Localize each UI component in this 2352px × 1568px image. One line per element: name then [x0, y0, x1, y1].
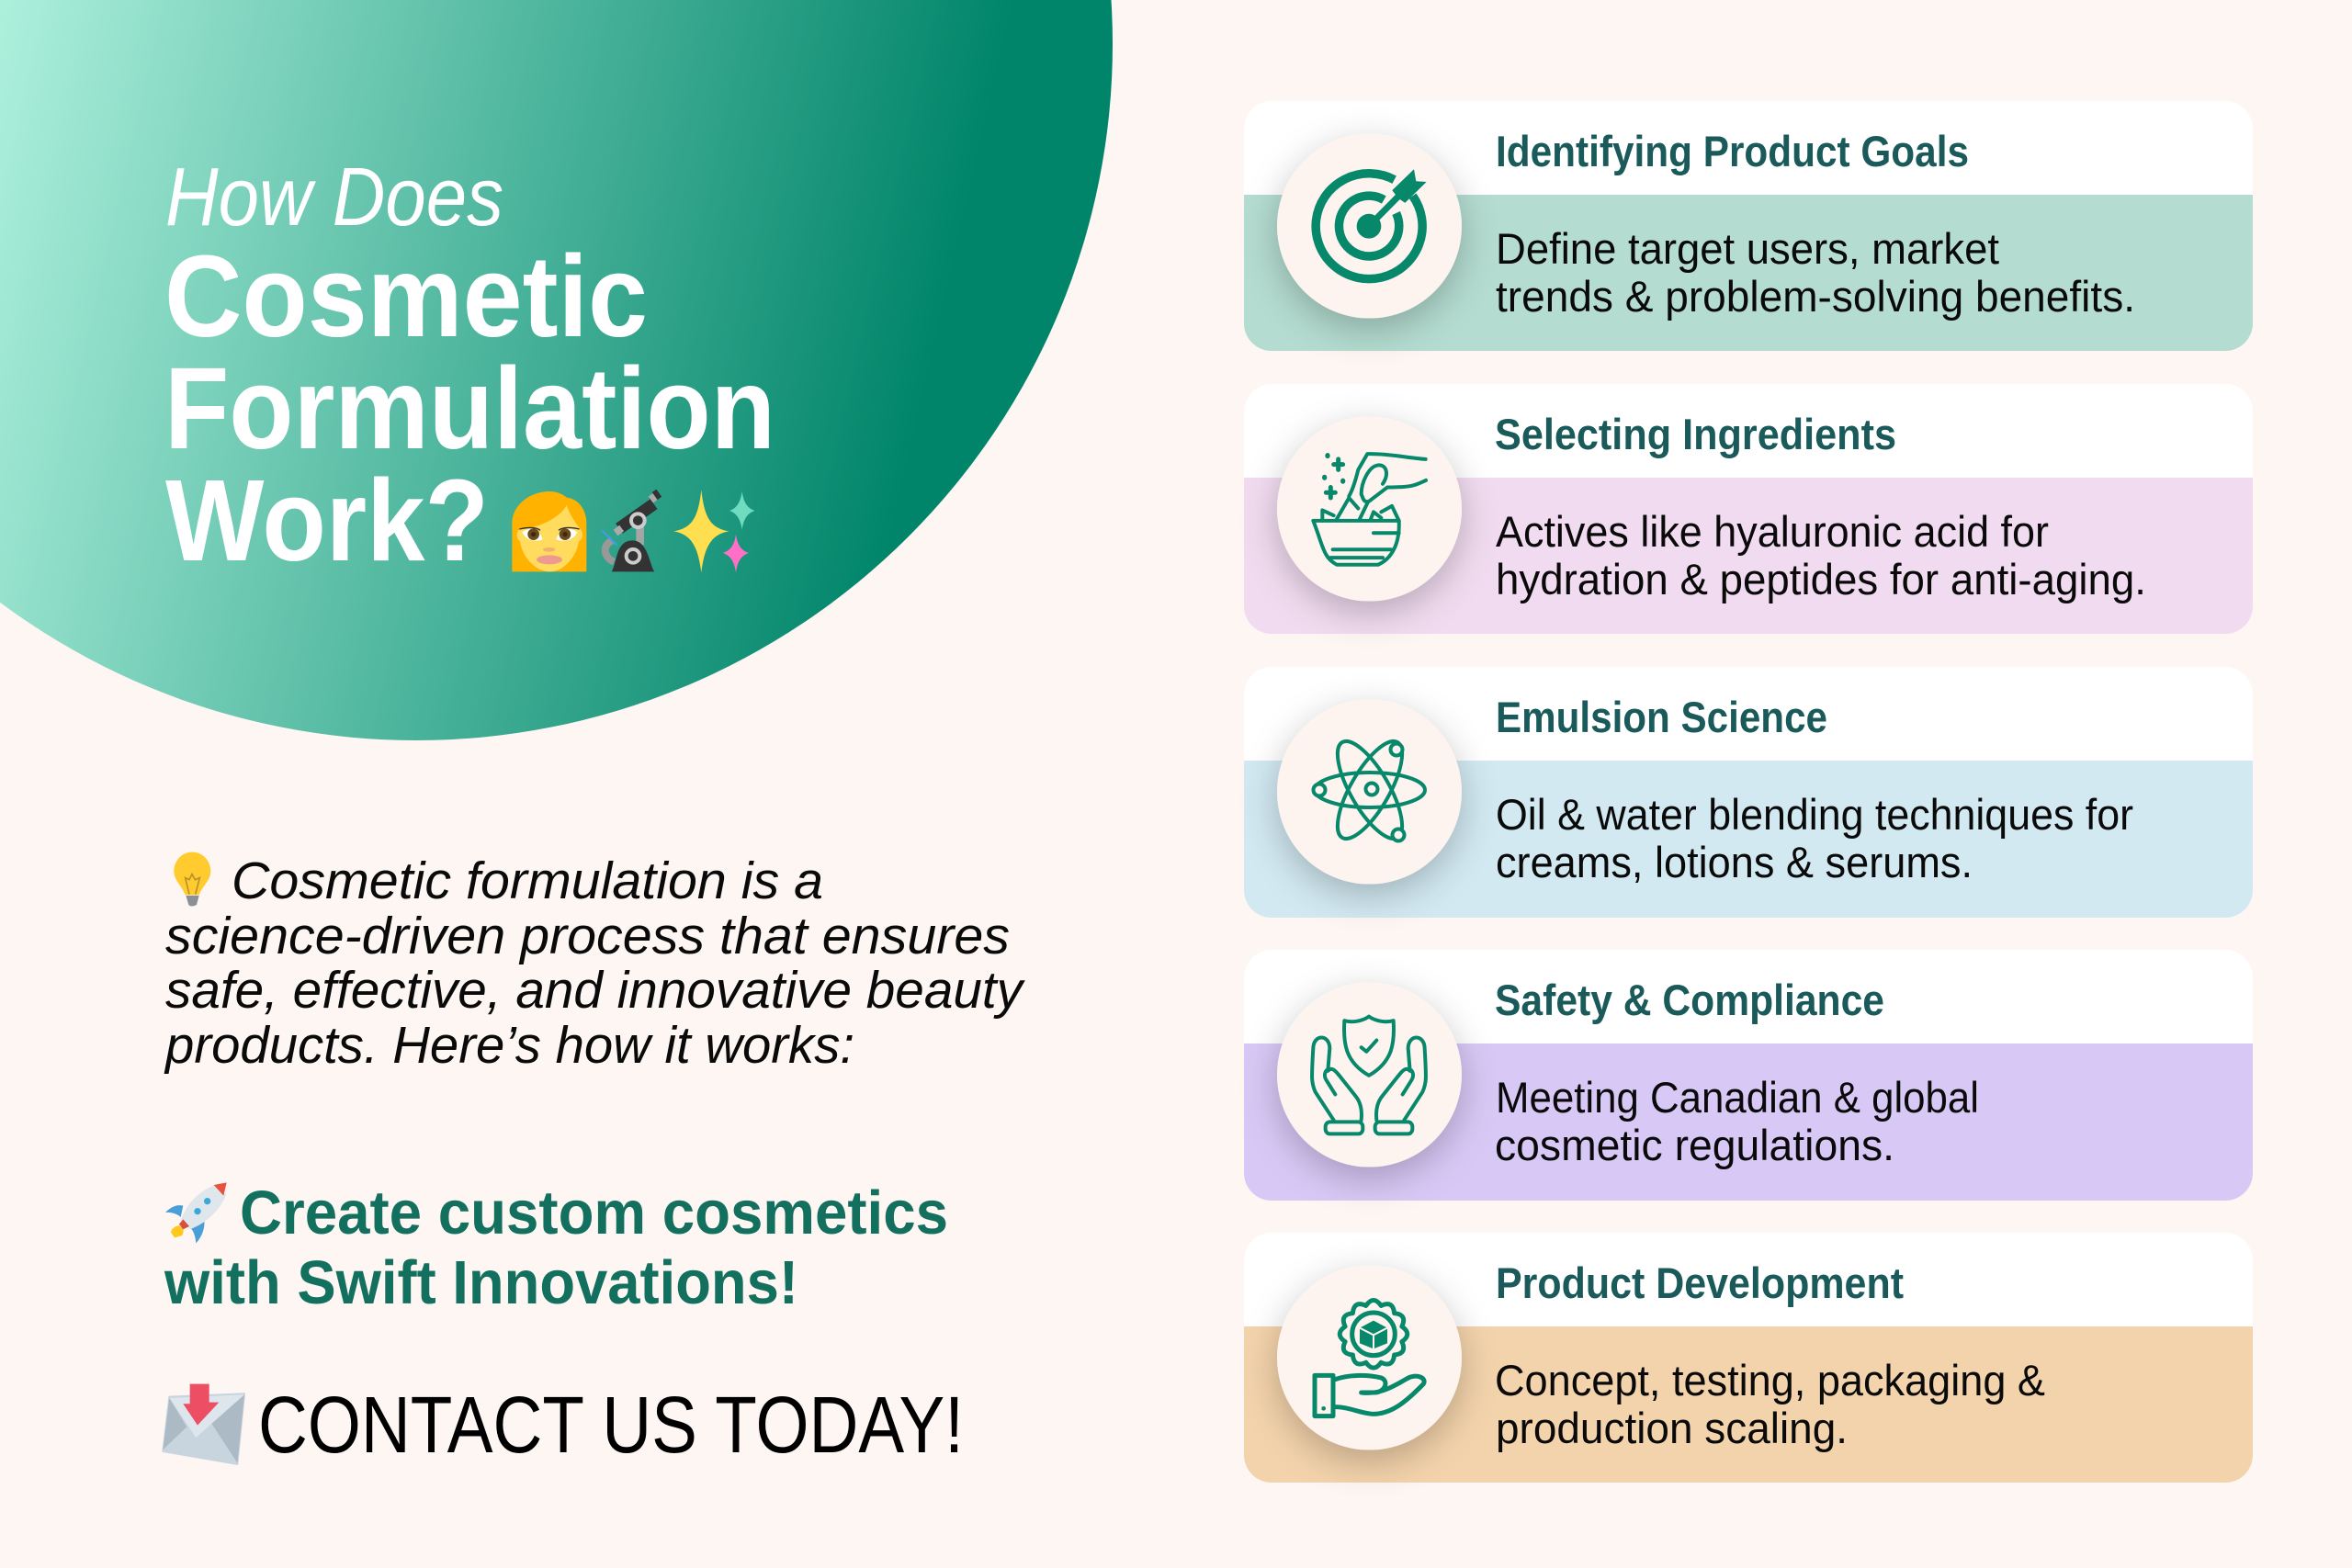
card description: Meeting Canadian & global — [1496, 1073, 1979, 1122]
icon: light bulb — [174, 852, 210, 906]
intro line 1: Cosmetic formulation is a — [232, 852, 823, 910]
hero circle with gradient — [0, 0, 1113, 740]
card heading: Safety & Compliance — [1495, 976, 1884, 1024]
card description: production scaling. — [1496, 1404, 1848, 1452]
icon: sparkles emoji — [673, 490, 755, 572]
card background — [1244, 101, 2253, 351]
card description: Concept, testing, packaging & — [1495, 1356, 2045, 1404]
title line: Cosmetic: Cosmetic — [164, 231, 648, 361]
call to action — [164, 1179, 948, 1317]
icon: mortar and pestle with ingredients — [1313, 453, 1426, 565]
icon: woman emoji — [512, 491, 586, 571]
card heading: Product Development — [1496, 1258, 1904, 1307]
panel: Safety & Compliance — [1244, 950, 2253, 1201]
card description: hydration & peptides for anti-aging. — [1496, 555, 2146, 604]
panel: Emulsion Science — [1244, 667, 2253, 918]
icon circle — [1277, 983, 1462, 1167]
card description — [1496, 790, 2133, 886]
title line: Work?: Work? — [165, 456, 489, 585]
icon: rocket — [165, 1182, 227, 1243]
icon: gear and cube over open hand — [1315, 1301, 1424, 1416]
icon circle — [1277, 417, 1462, 601]
title — [164, 152, 775, 585]
icon: envelope with arrow — [163, 1384, 244, 1464]
intro line 4: products. Here’s how it works: — [164, 1016, 854, 1075]
card heading: Emulsion Science — [1496, 693, 1827, 741]
card description: trends & problem-solving benefits. — [1496, 272, 2135, 321]
card description — [1495, 1356, 2045, 1452]
panel: Selecting Ingredients — [1244, 384, 2253, 634]
icon: atom — [1314, 733, 1425, 847]
card description: Define target users, market — [1496, 224, 1999, 273]
intro line 2: science-driven process that ensures — [165, 907, 1010, 965]
card background — [1244, 384, 2253, 634]
card background — [1244, 667, 2253, 918]
card description: creams, lotions & serums. — [1496, 838, 1973, 886]
card description: Oil & water blending techniques for — [1496, 790, 2133, 839]
card background — [1244, 950, 2253, 1201]
title line: How Does: How Does — [165, 152, 503, 243]
title line: Formulation: Formulation — [164, 344, 775, 473]
icon: microscope emoji — [602, 493, 659, 571]
intro line 3: safe, effective, and innovative beauty — [165, 961, 1025, 1020]
intro paragraph — [164, 852, 1025, 1075]
icon circle — [1277, 1266, 1462, 1450]
card heading: Identifying Product Goals — [1496, 127, 1969, 175]
card description — [1496, 507, 2146, 604]
card description — [1495, 1073, 1979, 1169]
icon circle — [1277, 134, 1462, 318]
card description: cosmetic regulations. — [1495, 1121, 1894, 1169]
card description — [1496, 224, 2135, 321]
icon: target with arrow — [1316, 169, 1427, 279]
card description: Actives like hyaluronic acid for — [1496, 507, 2049, 556]
panel: Product Development — [1244, 1233, 2253, 1483]
icon circle — [1277, 700, 1462, 884]
card background — [1244, 1233, 2253, 1483]
icon: shield held by hands — [1312, 1017, 1426, 1134]
panel: Identifying Product Goals — [1244, 101, 2253, 351]
call to action line 2: with Swift Innovations! — [164, 1248, 798, 1317]
call to action line 1: Create custom cosmetics — [240, 1179, 948, 1247]
contact line: CONTACT US TODAY! — [258, 1381, 964, 1470]
card heading: Selecting Ingredients — [1495, 410, 1896, 458]
